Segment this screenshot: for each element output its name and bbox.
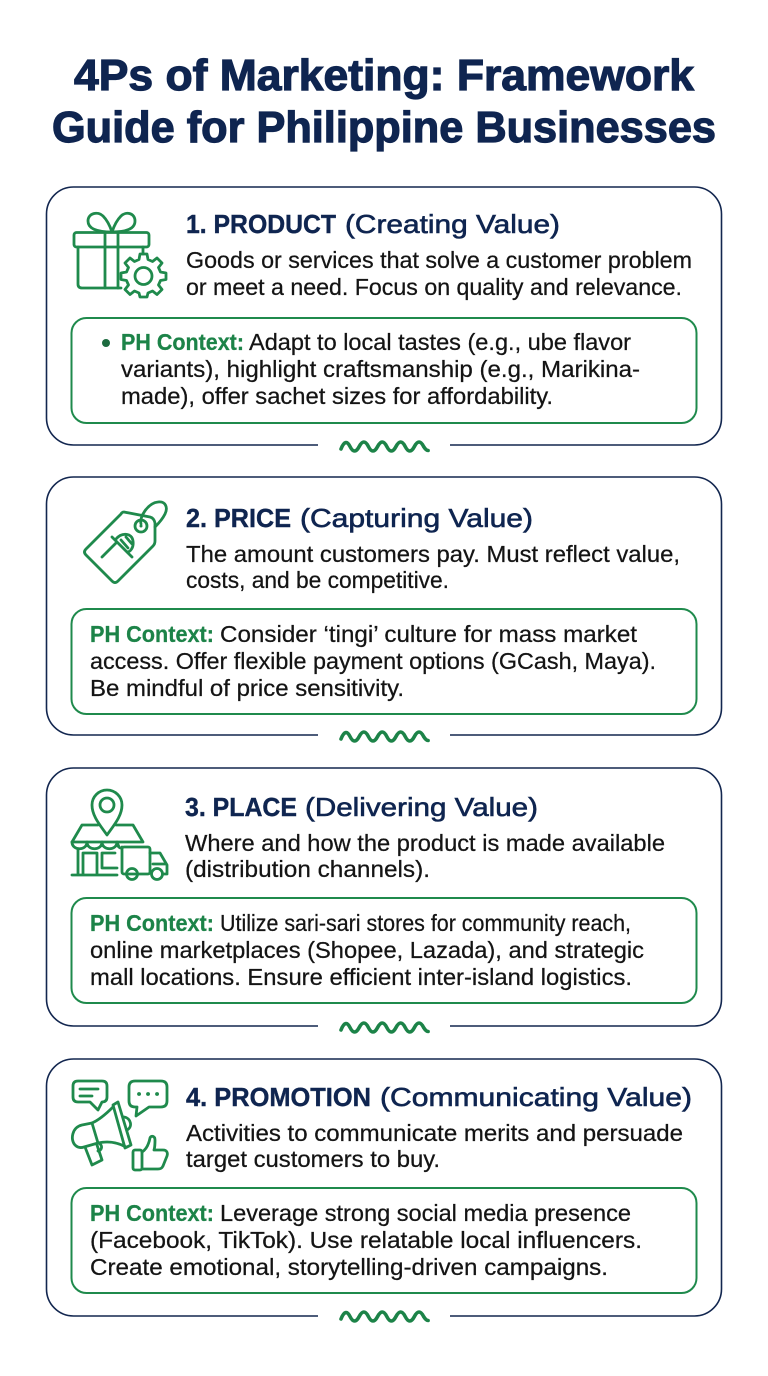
- panel: price: [46, 477, 722, 742]
- text: promotion description: [186, 1120, 683, 1172]
- icon: gift box with gear: [74, 213, 166, 297]
- text: place description: [185, 830, 665, 882]
- title: Guide for Philippine Businesses: [52, 104, 716, 152]
- icon: price tag with peso sign: [84, 502, 166, 582]
- title: [52, 52, 716, 152]
- heading: place: 3. PLACE: [185, 792, 297, 822]
- text: product description: [186, 247, 692, 300]
- heading: place: [185, 792, 538, 822]
- icon: map pin, store and delivery truck: [72, 790, 167, 880]
- callout: place PH context: [72, 898, 696, 1003]
- text: price description: [186, 541, 680, 593]
- callout: place PH context: Utilize sari-sari stores for community reach,: [220, 910, 631, 936]
- callout: product PH context: Adapt to local tastes (e.g., ube flavor: [249, 329, 631, 355]
- text: price description: The amount customers pay. Must reflect value,: [186, 541, 680, 567]
- text: price description: costs, and be competitive.: [186, 567, 449, 593]
- divider squiggle: [341, 1023, 428, 1032]
- heading: product: (Creating Value): [345, 209, 560, 239]
- heading: product: 1. PRODUCT: [186, 209, 336, 239]
- callout: price PH context: PH Context:: [90, 621, 214, 647]
- panel: place: [46, 768, 722, 1033]
- title: 4Ps of Marketing: Framework: [74, 52, 695, 100]
- callout: promotion PH context: [72, 1188, 696, 1293]
- callout: promotion PH context: Leverage strong social media presence: [220, 1200, 631, 1226]
- panel: promotion: [46, 1059, 722, 1323]
- callout: place PH context: PH Context:: [90, 910, 214, 936]
- heading: price: [186, 503, 533, 533]
- heading: price: (Capturing Value): [300, 503, 533, 533]
- callout: product PH context: made), offer sachet sizes for affordability.: [121, 383, 553, 409]
- text: place description: (distribution channels).: [185, 856, 430, 882]
- divider squiggle: [341, 442, 428, 451]
- text: product description: or meet a need. Focus on quality and relevance.: [186, 274, 682, 300]
- heading: promotion: (Communicating Value): [380, 1082, 692, 1112]
- text: promotion description: Activities to communicate merits and persuade: [186, 1120, 683, 1146]
- callout: promotion PH context: (Facebook, TikTok). Use relatable local influencers.: [90, 1227, 642, 1253]
- heading: price: 2. PRICE: [186, 503, 291, 533]
- heading: place: (Delivering Value): [305, 792, 538, 822]
- heading: promotion: 4. PROMOTION: [186, 1082, 371, 1112]
- callout: product PH context: [72, 318, 696, 423]
- panel: product: [46, 187, 722, 452]
- callout: price PH context: access. Offer flexible payment options (GCash, Maya).: [90, 648, 656, 674]
- callout: promotion PH context: Create emotional, storytelling-driven campaigns.: [90, 1254, 608, 1280]
- callout: place PH context: online marketplaces (Shopee, Lazada), and strategic: [90, 937, 644, 963]
- callout: product PH context: variants), highlight craftsmanship (e.g., Marikina-: [121, 356, 640, 382]
- callout: product PH context: PH Context:: [121, 329, 244, 355]
- callout: price PH context: Consider ‘tingi’ culture for mass market: [220, 621, 638, 647]
- text: place description: Where and how the product is made available: [185, 830, 665, 856]
- text: promotion description: target customers to buy.: [186, 1146, 440, 1172]
- heading: product: [186, 209, 560, 239]
- icon: megaphone, chat bubbles and thumbs up: [72, 1081, 167, 1170]
- divider squiggle: [341, 732, 428, 741]
- callout: price PH context: Be mindful of price sensitivity.: [90, 675, 404, 701]
- text: product description: Goods or services that solve a customer problem: [186, 247, 692, 273]
- heading: promotion: [186, 1082, 692, 1112]
- callout: promotion PH context: PH Context:: [90, 1200, 214, 1226]
- callout: place PH context: mall locations. Ensure efficient inter-island logistics.: [90, 964, 632, 990]
- callout: price PH context: [72, 609, 696, 714]
- divider squiggle: [341, 1312, 428, 1321]
